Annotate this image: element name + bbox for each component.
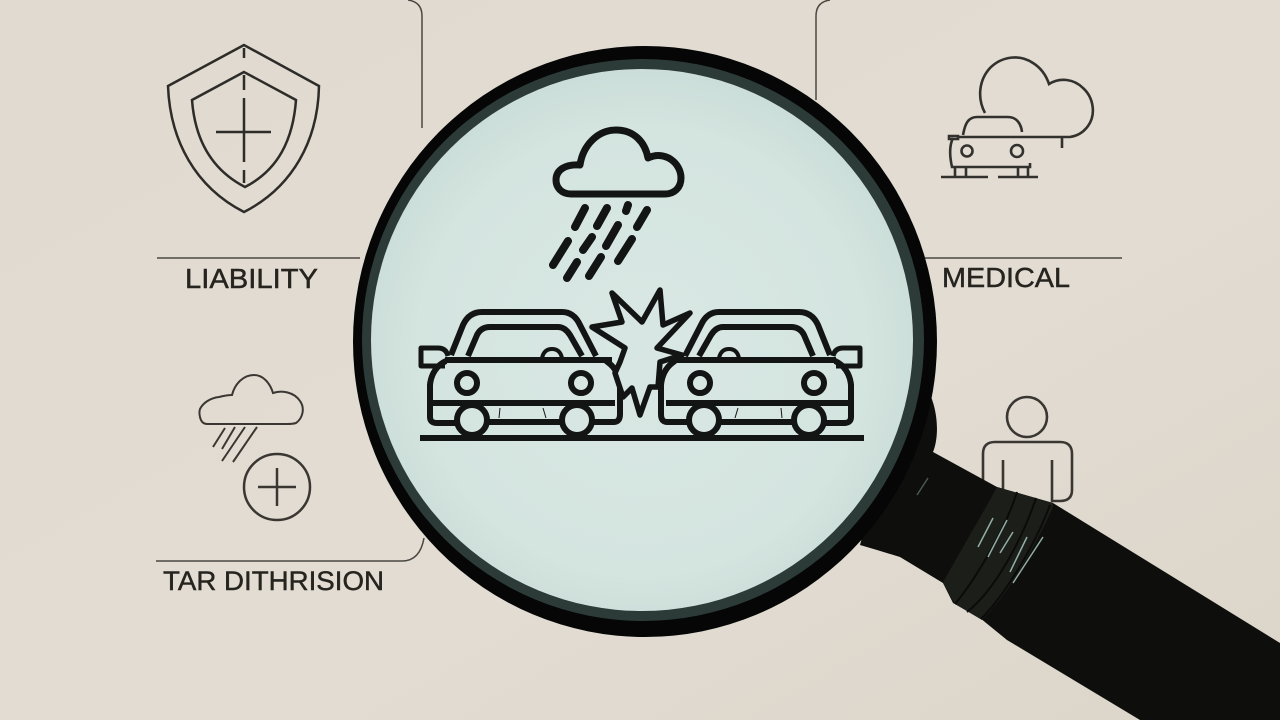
heading: liability: LIABILITY	[185, 263, 318, 294]
icon: colliding cars	[420, 290, 864, 438]
panel: lower left	[156, 375, 424, 596]
panel: liability	[157, 0, 422, 294]
icon: car with cloud	[941, 57, 1093, 177]
car: left	[421, 312, 620, 435]
icon: rain cloud	[200, 375, 303, 462]
icon: plus in circle	[244, 454, 310, 520]
ground line	[420, 435, 864, 441]
handle	[860, 385, 1280, 720]
icon: impact starburst	[592, 290, 690, 415]
car: right	[661, 312, 860, 435]
panel: medical	[816, 0, 1122, 293]
icon: rain cloud large	[553, 130, 681, 278]
heading: garbled division label: TAR DITHRISION	[163, 566, 384, 596]
lens rim	[353, 46, 937, 637]
icon: shield with cross	[168, 45, 319, 212]
lens glass	[371, 69, 913, 611]
icon: person	[983, 397, 1072, 501]
heading: medical: MEDICAL	[942, 262, 1070, 293]
magnifying glass	[353, 46, 1280, 720]
